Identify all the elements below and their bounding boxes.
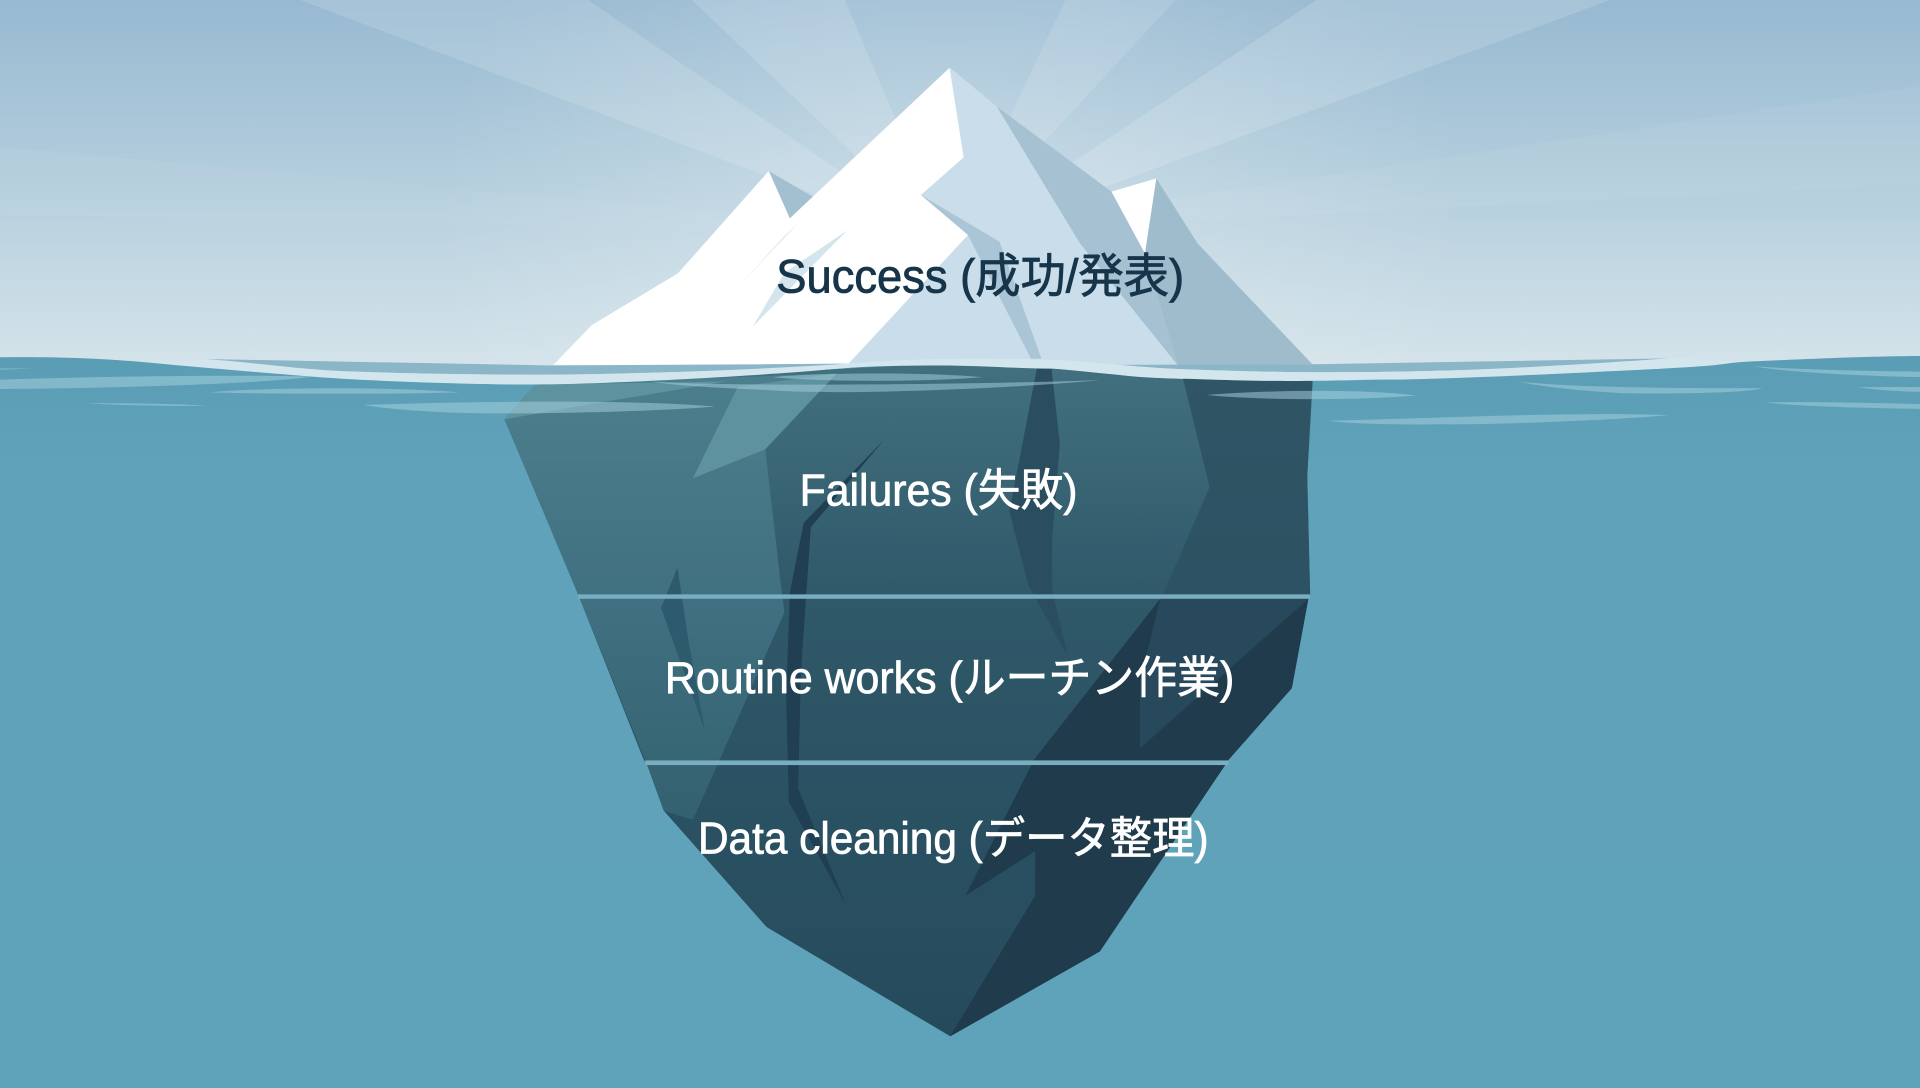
small left peak shadow: [769, 171, 819, 223]
underwater body: [504, 366, 1313, 1036]
iceberg light body: [847, 67, 1313, 365]
small right peak: [1111, 178, 1156, 253]
right crack: [1009, 369, 1068, 657]
left lighter facet: [505, 373, 837, 820]
dark right facet: [950, 599, 1308, 1036]
foam band at waterline: [135, 358, 1756, 387]
ocean water: [0, 356, 1920, 1088]
iceberg under water: [504, 366, 1313, 1036]
label: success: Success (成功/発表): [776, 250, 1184, 303]
white iceberg face: [553, 68, 968, 365]
label: routine works: Routine works (ルーチン作業): [665, 654, 1234, 703]
iceberg right shade: [1145, 178, 1312, 365]
label: failures: Failures (失敗): [800, 467, 1078, 516]
iceberg above water: [553, 67, 1313, 365]
pale upper facet: [693, 373, 837, 478]
medium right facet: [1140, 599, 1308, 748]
foam band over iceberg: [358, 358, 1669, 384]
depth divider lines: [578, 594, 1310, 765]
back water wedges: [205, 358, 1669, 375]
facets in white face: [738, 223, 798, 287]
water ripples: [0, 366, 1920, 424]
center crack: [786, 439, 884, 905]
pale left top facet: [505, 381, 727, 419]
iceberg shaded band: [997, 107, 1177, 365]
iceberg inner shadow: [921, 195, 1041, 359]
left crack: [661, 568, 705, 731]
right upper facet: [1163, 376, 1313, 594]
sky background: [0, 0, 1920, 380]
sun rays: [0, 0, 1920, 367]
label: data cleaning: Data cleaning (データ整理): [698, 814, 1209, 863]
